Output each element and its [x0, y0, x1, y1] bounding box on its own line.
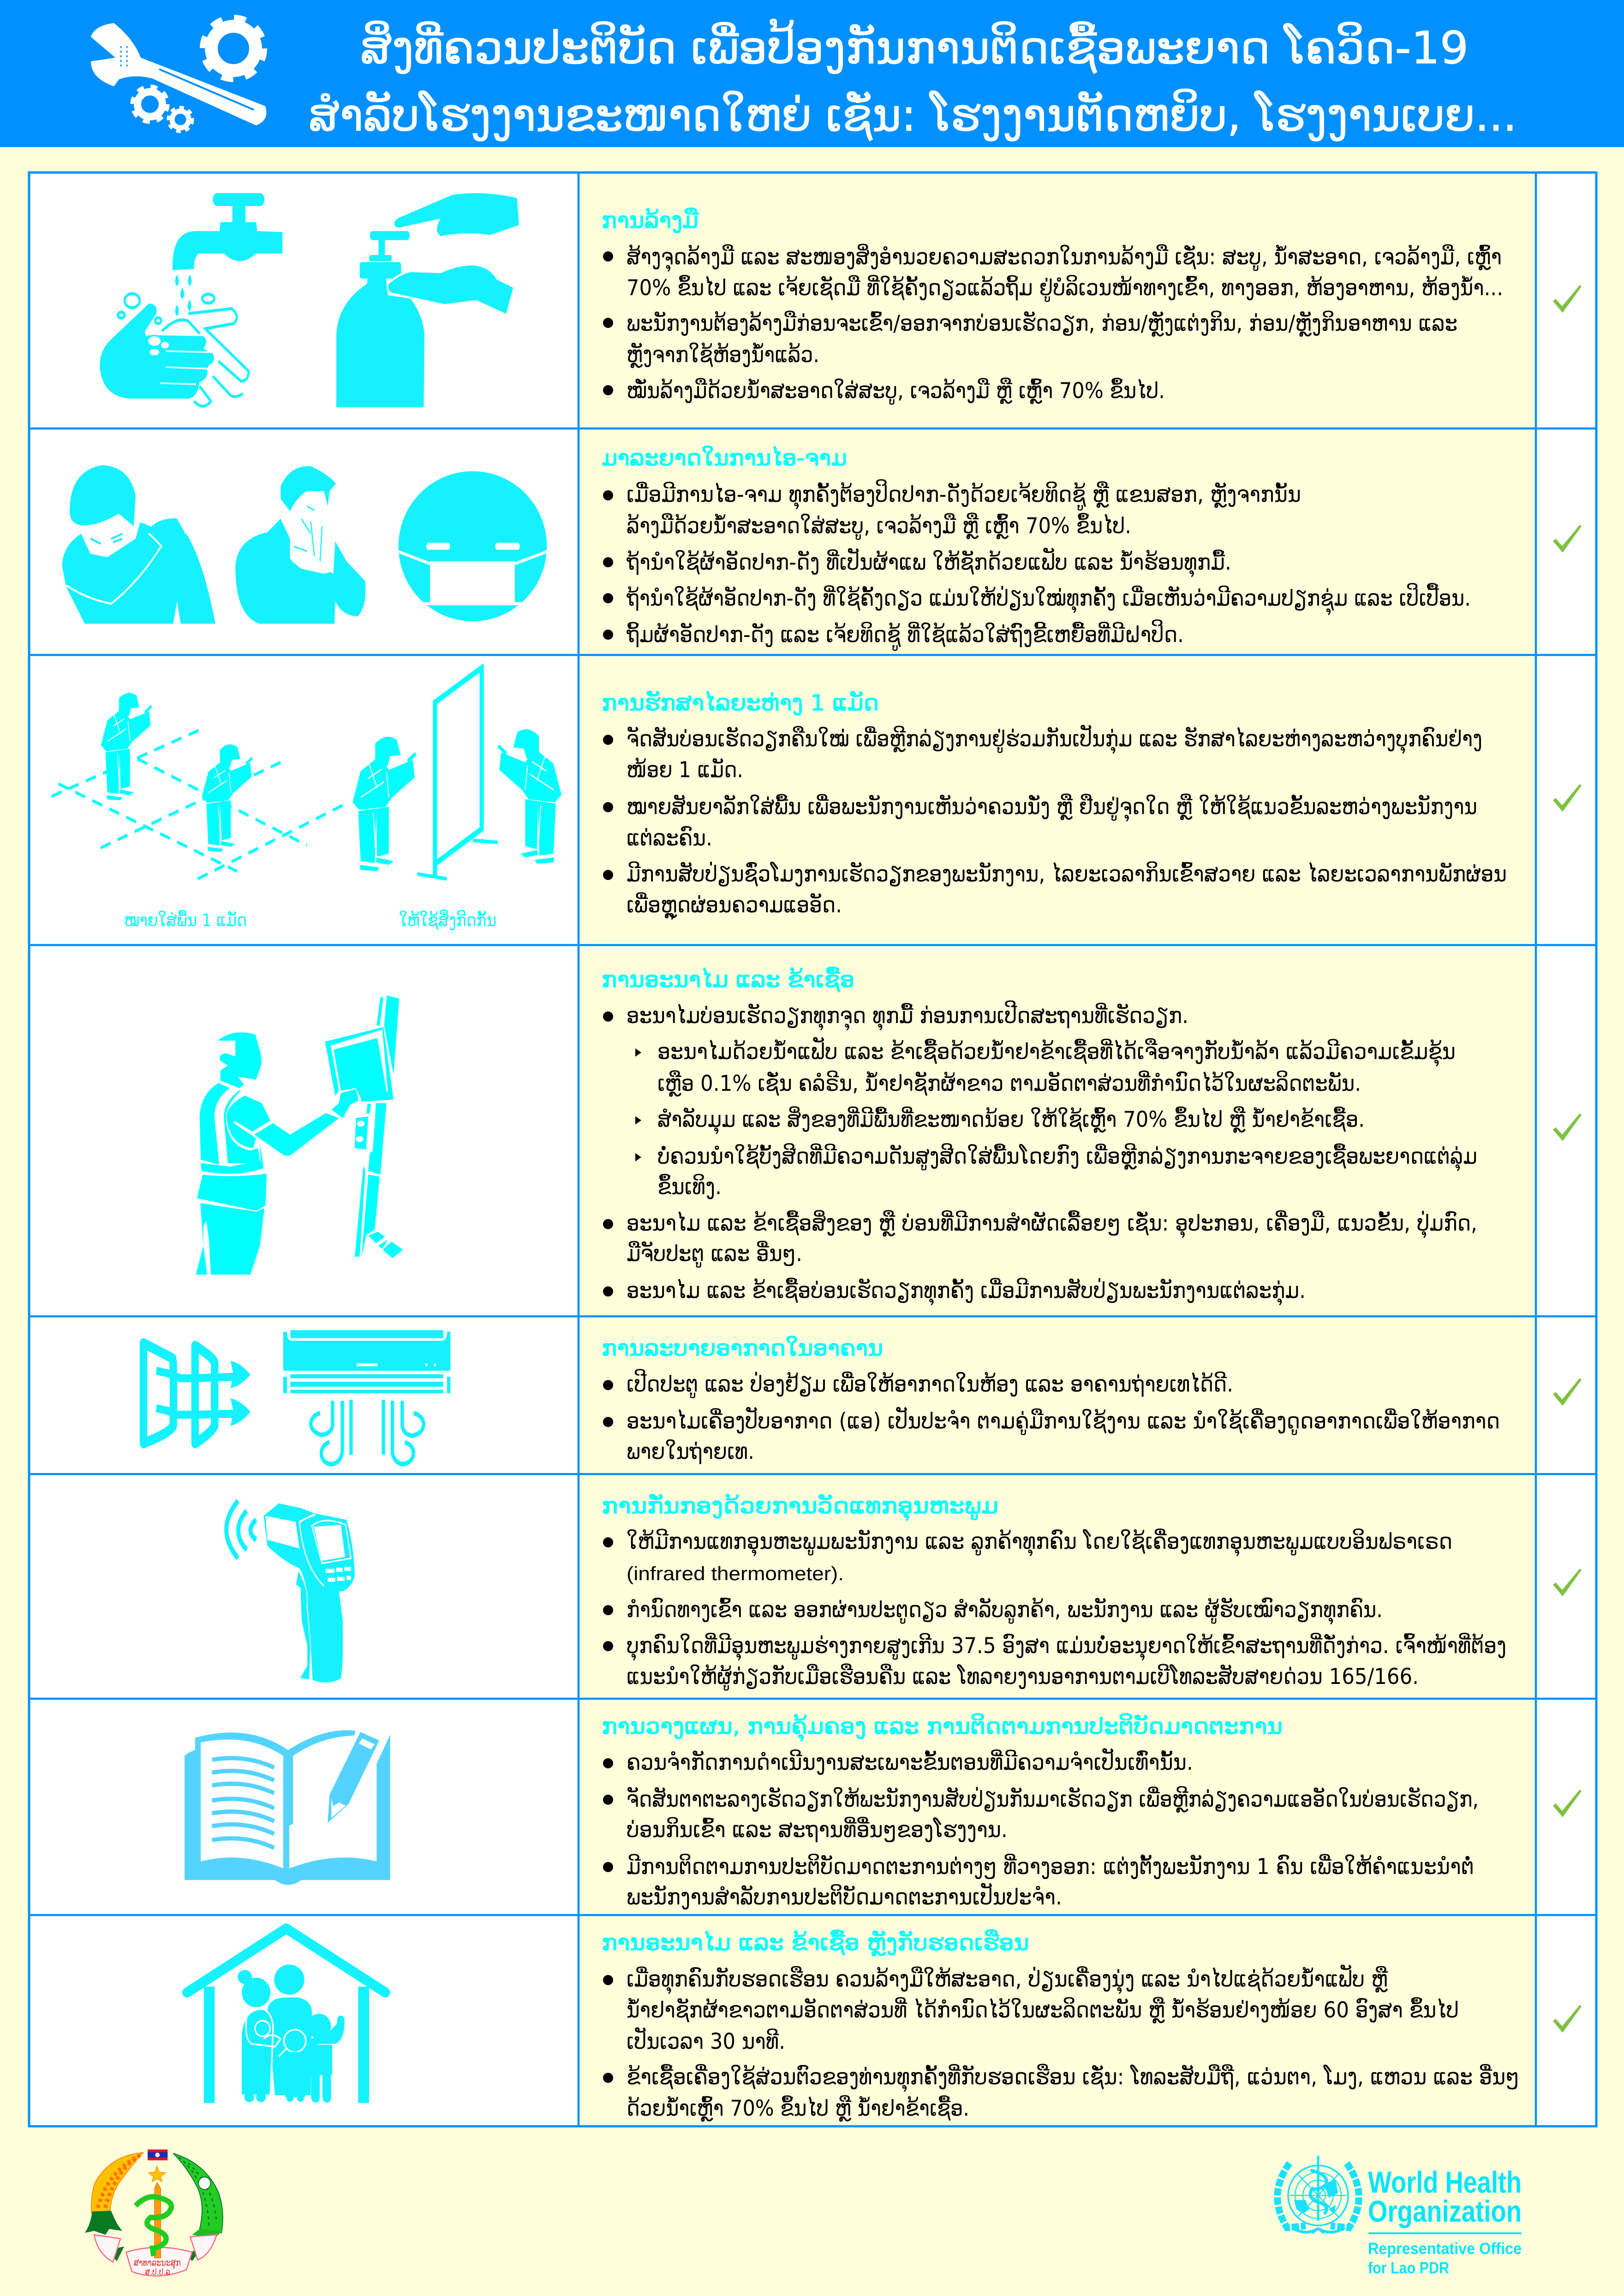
icon: WHO emblem	[1278, 2156, 1359, 2234]
icon: check mark	[1553, 1113, 1582, 1141]
icon: person sneezing into tissue	[235, 466, 365, 624]
bullet list: ສໍາລັບມຸມ ແລະ ສິ່ງຂອງທີ່ມີພື້ນທີ່ຂະໜາດນ້ອຍ ໃຫ້ໃຊ້ເຫຼົ້າ 70% ຂຶ້ນໄປ ຫຼື ນໍ້າຢາຂ້າເຊື້ອ.	[657, 1106, 1365, 1135]
bullet list: ຂ້າເຊື້ອເຄື່ອງໃຊ້ສ່ວນຕົວຂອງທ່ານທຸກຄັ້ງທີ່ກັບຮອດເຮືອນ ເຊັ່ນ: ໂທລະສັບມືຖື, ແວ່ນຕາ, ໂມງ, ແຫວນ ແລະ ອື່ນໆ	[627, 2064, 1519, 2092]
icon: family in house	[187, 1928, 385, 2103]
caption: barrier: ໃຫ້ໃຊ້ສິ່ງກີດກັ້ນ	[399, 910, 496, 930]
icon: check mark	[1553, 2005, 1582, 2033]
bullet list: ເຫຼືອ 0.1% ເຊັ່ນ ຄລໍຣີນ, ນໍ້າຢາຊັກຜ້າຂາວ ຕາມອັດຕາສ່ວນທີ່ກໍານົດໄວ້ໃນຜະລິດຕະພັນ.	[657, 1071, 1361, 1097]
icon: floor markings with workers	[52, 693, 348, 879]
heading: ການອະນາໄມ ແລະ ຂ້າເຊື້ອ	[602, 967, 854, 993]
panel: physical distancing	[52, 668, 1582, 930]
label: organization name: World Health	[1368, 2165, 1522, 2199]
bullet list: ມີການຕິດຕາມການປະຕິບັດມາດຕະການຕ່າງໆ ທີ່ວາງອອກ: ແຕ່ງຕັ້ງພະນັກງານ 1 ຄົນ ເພື່ອໃຫ້ຄໍາແນະນໍາຕໍ່	[627, 1854, 1474, 1880]
bullet list	[603, 1369, 1500, 1464]
icon: open book and pencil	[185, 1728, 390, 1885]
icon: open window with airflow	[143, 1343, 251, 1443]
panel: after returning home	[187, 1928, 1582, 2122]
icon: faucet and washing hands	[100, 193, 282, 406]
bullet list: (infrared thermometer).	[627, 1563, 844, 1584]
header banner	[0, 0, 1624, 147]
bullet list: ແນະນໍາໃຫ້ຜູ້ກ່ຽວກັບເມືອເຮືອນຄືນ ແລະ ໂທລາຍງານອາການຕາມເບີໂທລະສັບສາຍດ່ວນ 165/166.	[627, 1664, 1419, 1690]
bullet list	[603, 1001, 1477, 1306]
bullet list: ຄວນຈໍາກັດການດໍາເນີນງານສະເພາະຂັ້ນຕອນທີ່ມີຄວາມຈໍາເປັນເທົ່ານັ້ນ.	[627, 1748, 1193, 1775]
bullet list: ອະນາໄມ ແລະ ຂ້າເຊື້ອບ່ອນເຮັດວຽກທຸກຄັ້ງ ເມື່ອມີການສັບປ່ຽນພະນັກງານແຕ່ລະກຸ່ມ.	[627, 1278, 1306, 1306]
icon: check mark	[1553, 1378, 1582, 1406]
bullet list: ອະນາໄມເຄື່ອງປັບອາກາດ (ແອ) ເປັນປະຈໍາ ຕາມຄູ່ມືການໃຊ້ງານ ແລະ ນໍາໃຊ້ເຄື່ອງດູດອາກາດເພື່ອໃຫ້ອາກາດ	[627, 1407, 1500, 1435]
heading: ການລະບາຍອາກາດໃນອາຄານ	[602, 1336, 883, 1361]
panel: cough and sneeze etiquette	[62, 446, 1582, 650]
bullet list: ຖິ້ມຜ້າອັດປາກ-ດັງ ແລະ ເຈ້ຍທິດຊູ້ ທີ່ໃຊ້ແລ້ວໃສ່ຖົງຂີ້ເຫຍື້ອທີ່ມີຝາປິດ.	[626, 620, 1184, 650]
icon: person wiping control panel	[196, 995, 403, 1275]
heading: ການວາງແຜນ, ການຄຸ້ມຄອງ ແລະ ການຕິດຕາມການປະຕິບັດມາດຕະການ	[602, 1714, 1283, 1742]
bullet list: ເປີດປະຕູ ແລະ ປ່ອງຢ້ຽມ ເພື່ອໃຫ້ອາກາດໃນຫ້ອງ ແລະ ອາຄານຖ່າຍເທໄດ້ດີ.	[627, 1369, 1233, 1398]
label: organization name line 2: Organization	[1368, 2194, 1522, 2228]
bullet list	[603, 244, 1503, 404]
bullet list: ເພື່ອຫຼຸດຜ່ອນຄວາມແອອັດ.	[627, 892, 842, 920]
label: representative office: Representative Office	[1368, 2240, 1522, 2258]
icon: check mark	[1553, 784, 1582, 812]
bullet list: ບໍ່ຄວນນໍາໃຊ້ບັ້ງສີດທີ່ມີຄວາມດັນສູງສີດໃສ່ພື້ນໂດຍກົງ ເພື່ອຫຼີກລ່ຽງການກະຈາຍຂອງເຊື້ອພະຍາດແຕ່ລຸ່ມ	[657, 1143, 1477, 1172]
logo: World Health Organization	[1278, 2156, 1522, 2277]
bullet list: ຫຼັງຈາກໃຊ້ຫ້ອງນໍ້າແລ້ວ.	[627, 342, 819, 368]
bullet list: ດ້ວຍນໍ້າເຫຼົ້າ 70% ຂຶ້ນໄປ ຫຼື ນໍ້າຢາຂ້າເຊື້ອ.	[627, 2095, 969, 2122]
icon: wrench and gears	[91, 18, 267, 131]
logo: Lao Ministry of Health emblem: ສາທາລະນະສຸກ	[134, 2257, 181, 2269]
icon: sanitizer pump and hands	[336, 193, 519, 407]
bullet list: ຈັດສັນຕາຕະລາງເຮັດວຽກໃຫ້ພະນັກງານສັບປ່ຽນກັນມາເຮັດວຽກ ເພື່ອຫຼີກລ່ຽງຄວາມແອອັດໃນບ່ອນເຮັດວຽກ,	[627, 1786, 1479, 1813]
bullet list: ອະນາໄມບ່ອນເຮັດວຽກທຸກຈຸດ ທຸກມື້ ກ່ອນການເປີດສະຖານທີ່ເຮັດວຽກ.	[627, 1001, 1188, 1031]
icon: check mark	[1553, 525, 1582, 553]
logo: Lao Ministry of Health emblem	[85, 2149, 223, 2277]
bullet list	[603, 725, 1507, 920]
bullet list: ຂຶ້ນເທິງ.	[657, 1174, 722, 1200]
label: for Lao PDR: for Lao PDR	[1368, 2259, 1449, 2277]
bullet list: 70% ຂຶ້ນໄປ ແລະ ເຈ້ຍເຊັດມື ທີ່ໃຊ້ຄັ້ງດຽວແລ້ວຖິ້ມ ຢູ່ບໍລິເວນໜ້າທາງເຂົ້າ, ທາງອອກ, ຫ້ອງອາຫານ, ຫ້ອງນໍ້າ...	[627, 275, 1503, 302]
panel: ventilation	[143, 1330, 1582, 1464]
icon: person coughing into elbow	[62, 465, 215, 624]
panel: cleaning and disinfection	[196, 967, 1582, 1306]
bullet list: ບຸກຄົນໃດທີ່ມີອຸນຫະພູມຮ່າງກາຍສູງເກີນ 37.5 ອົງສາ ແມ່ນບໍ່ອະນຸຍາດໃຫ້ເຂົ້າສະຖານທີ່ດັ່ງກ່າວ. ເຈົ້າໜ້າທີ່ຕ້ອງ	[627, 1633, 1506, 1661]
bullet list: ຖ້ານໍາໃຊ້ຜ້າອັດປາກ-ດັງ ທີ່ເປັນຜ້າແພ ໃຫ້ຊັກດ້ວຍແຟັບ ແລະ ນໍ້າຮ້ອນທຸກມື້.	[626, 547, 1231, 577]
bullet list: ບ່ອນກິນເຂົ້າ ແລະ ສະຖານທີ່ອື່ນໆຂອງໂຮງງານ.	[627, 1817, 1008, 1843]
heading: ມາລະຍາດໃນການໄອ-ຈາມ	[602, 446, 847, 471]
bullet list: ແຕ່ລະຄົນ.	[627, 826, 712, 851]
caption: floor marking: ໝາຍໃສ່ພື້ນ 1 ແມັດ	[124, 910, 247, 930]
bullet list: ໝັ່ນລ້າງມືດ້ວຍນໍ້າສະອາດໃສ່ສະບູ, ເຈວລ້າງມື ຫຼື ເຫຼົ້າ 70% ຂຶ້ນໄປ.	[627, 378, 1165, 404]
icon: check mark	[1553, 1569, 1582, 1596]
bullet list: ມືຈັບປະຕູ ແລະ ອື່ນໆ.	[627, 1241, 802, 1267]
bullet list: ສ້າງຈຸດລ້າງມື ແລະ ສະໜອງສິ່ງອໍານວຍຄວາມສະດວກໃນການລ້າງມື ເຊັ່ນ: ສະບູ, ນໍ້າສະອາດ, ເຈວລ້າງມື, ເຫຼົ້າ	[627, 244, 1502, 272]
bullet list	[603, 1748, 1479, 1910]
bullet list: ຈັດສັນບ່ອນເຮັດວຽກຄືນໃໝ່ ເພື່ອຫຼີກລ່ຽງການຢູ່ຮ່ວມກັນເປັນກຸ່ມ ແລະ ຮັກສາໄລຍະຫ່າງລະຫວ່າງບຸກຄົນຢ່າງ	[627, 725, 1482, 754]
bullet list: ໜ້ອຍ 1 ແມັດ.	[627, 757, 743, 783]
bullet list: ມີການສັບປ່ຽນຊົ່ວໂມງການເຮັດວຽກຂອງພະນັກງານ, ໄລຍະເວລາກິນເຂົ້າສວາຍ ແລະ ໄລຍະເວລາການພັກຜ່ອນ	[627, 861, 1507, 887]
panel: planning and management	[185, 1714, 1582, 1910]
bullet list: ພະນັກງານສໍາລັບການປະຕິບັດມາດຕະການເປັນປະຈໍາ.	[627, 1883, 1062, 1910]
logo: Lao Ministry of Health emblem: ສ.ປ.ປ.ລ	[145, 2267, 170, 2277]
icon: check mark	[1553, 285, 1582, 313]
bullet list: ອະນາໄມ ແລະ ຂ້າເຊື້ອສິ່ງຂອງ ຫຼື ບ່ອນທີ່ມີການສໍາຜັດເລື້ອຍໆ ເຊັ່ນ: ອຸປະກອນ, ເຄື່ອງມື, ແນວຂັ້ນ, ປຸ່ມກົດ,	[627, 1210, 1477, 1238]
bullet list: ເມື່ອທຸກຄົນກັບຮອດເຮືອນ ຄວນລ້າງມືໃຫ້ສະອາດ, ປ່ຽນເຄື່ອງນຸ່ງ ແລະ ນໍາໄປແຊ່ດ້ວຍນໍ້າແຟັບ ຫຼື	[627, 1964, 1388, 1994]
icon: workers with barrier	[352, 668, 561, 879]
bullet list	[603, 480, 1471, 650]
heading: ການຮັກສາໄລຍະຫ່າງ 1 ແມັດ	[602, 690, 879, 716]
bullet list: ນໍ້າຢາຊັກຜ້າຂາວຕາມອັດຕາສ່ວນທີ່ ໄດ້ກໍານົດໄວ້ໃນຜະລິດຕະພັນ ຫຼື ນໍ້າຮ້ອນຢ່າງໜ້ອຍ 60 ອົງສາ ຂຶ້ນໄປ	[627, 1997, 1459, 2023]
heading: ການອະນາໄມ ແລະ ຂ້າເຊື້ອ ຫຼັງກັບຮອດເຮືອນ	[602, 1930, 1029, 1956]
bullet list: ເປັນເວລາ 30 ນາທີ.	[627, 2027, 785, 2054]
title line 2: ສໍາລັບໂຮງງານຂະໜາດໃຫຍ່ ເຊັ່ນ: ໂຮງງານຕັດຫຍິບ, ໂຮງງານເບຍ...	[309, 89, 1517, 141]
panel: temperature screening	[227, 1493, 1582, 1690]
title line 1: ສິ່ງທີ່ຄວນປະຕິບັດ ເພື່ອປ້ອງກັນການຕິດເຊື້ອພະຍາດ ໂຄວິດ-19	[360, 19, 1469, 74]
icon: infrared thermometer	[227, 1501, 355, 1683]
bullet list: ໝາຍສັນຍາລັກໃສ່ພື້ນ ເພື່ອພະນັກງານເຫັນວ່າຄວນນັ່ງ ຫຼື ຢືນຢູ່ຈຸດໃດ ຫຼື ໃຫ້ໃຊ້ແນວຂັ້ນລະຫວ່າງພະນັກງານ	[627, 794, 1477, 822]
heading: ການກັ່ນກອງດ້ວຍການວັດແທກອຸນຫະພູມ	[602, 1493, 998, 1521]
icon: air conditioner	[283, 1330, 450, 1464]
heading: ການລ້າງມື	[602, 208, 699, 233]
icon: check mark	[1553, 1790, 1582, 1817]
bullet list: ເມື່ອມີການໄອ-ຈາມ ທຸກຄັ້ງຕ້ອງປິດປາກ-ດັງດ້ວຍເຈ້ຍທິດຊູ້ ຫຼື ແຂນສອກ, ຫຼັງຈາກນັ້ນ	[627, 480, 1301, 510]
bullet list: ພາຍໃນຖ່າຍເທ.	[627, 1439, 754, 1464]
icon: face mask	[397, 471, 548, 621]
bullet list: ຖ້ານໍາໃຊ້ຜ້າອັດປາກ-ດັງ ທີ່ໃຊ້ຄັ້ງດຽວ ແມ່ນໃຫ້ປ່ຽນໃໝ່ທຸກຄັ້ງ ເມື່ອເຫັນວ່າມີຄວາມປຽກຊຸ່ມ ແລະ ເປິເປື້ອນ.	[626, 583, 1471, 615]
bullet list: ລ້າງມືດ້ວຍນໍ້າສະອາດໃສ່ສະບູ, ເຈວລ້າງມື ຫຼື ເຫຼົ້າ 70% ຂຶ້ນໄປ.	[627, 513, 1131, 540]
bullet list: ອະນາໄມດ້ວຍນໍ້າແຟັບ ແລະ ຂ້າເຊື້ອດ້ວຍນໍ້າຢາຂ້າເຊື້ອທີ່ໄດ້ເຈືອຈາງກັບນໍ້າລ້າ ແລ້ວມີຄວາມເຂັ້ມຂຸ້ນ	[657, 1037, 1456, 1067]
bullet list: ກໍານົດທາງເຂົ້າ ແລະ ອອກຜ່ານປະຕູດຽວ ສໍາລັບລູກຄ້າ, ພະນັກງານ ແລະ ຜູ້ຮັບເໝົາວຽກທຸກຄົນ.	[627, 1597, 1383, 1625]
bullet list	[603, 1529, 1506, 1690]
bullet list: ພະນັກງານຕ້ອງລ້າງມືກ່ອນຈະເຂົ້າ/ອອກຈາກບ່ອນເຮັດວຽກ, ກ່ອນ/ຫຼັງແຕ່ງກິນ, ກ່ອນ/ຫຼັງກິນອາຫານ ແລະ	[627, 311, 1457, 337]
bullet list	[603, 1964, 1519, 2122]
panel: hand washing	[100, 193, 1582, 407]
bullet list: ໃຫ້ມີການແທກອຸນຫະພູມພະນັກງານ ແລະ ລູກຄ້າທຸກຄົນ ໂດຍໃຊ້ເຄື່ອງແທກອຸນຫະພູມແບບອິນຟຣາເຣດ	[627, 1529, 1452, 1557]
